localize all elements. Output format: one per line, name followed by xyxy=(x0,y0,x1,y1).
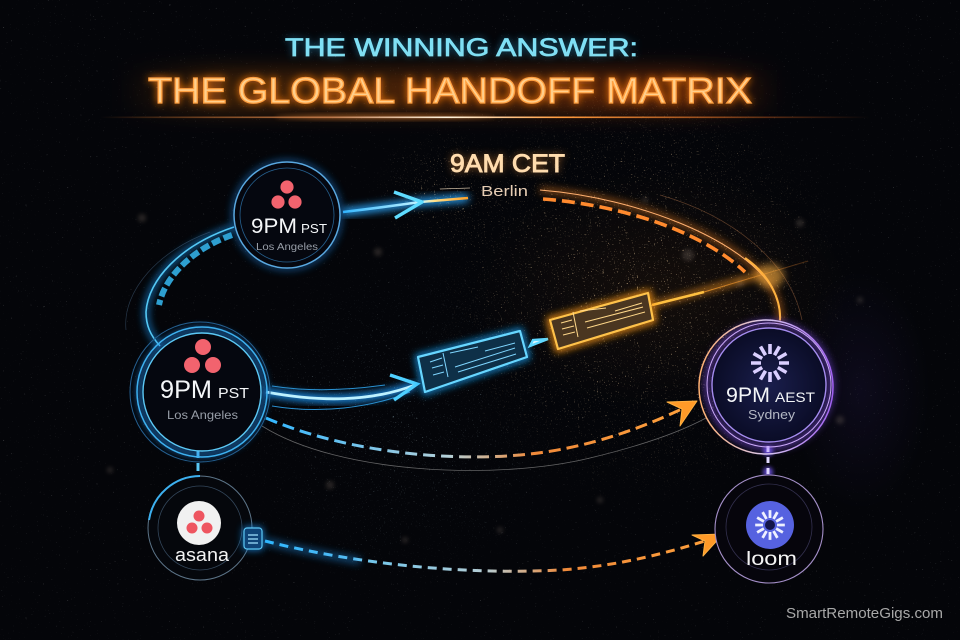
arrowhead: top connector xyxy=(394,192,422,218)
arrowhead: dashed connector xyxy=(667,401,697,426)
connector: asana to loom (dashed) xyxy=(265,534,723,571)
label: Los Angeles: Los Angeles xyxy=(167,408,238,422)
label: 9PM PST xyxy=(160,376,249,404)
icon: asana dots xyxy=(184,339,221,373)
ticket: blue xyxy=(418,331,527,392)
arrowhead: main connector xyxy=(390,375,417,400)
small arrow between tickets xyxy=(530,339,548,346)
node: Sydney xyxy=(699,320,833,454)
icon: loom logo xyxy=(746,501,794,549)
label: Sydney: Sydney xyxy=(748,408,796,422)
title block xyxy=(100,34,870,120)
connector: top Los Angeles to Berlin xyxy=(343,188,470,218)
label: 9PM PST: PST xyxy=(301,221,327,236)
icon: loom burst xyxy=(751,344,789,382)
label: loom: loom xyxy=(746,549,797,570)
label: 9PM PST xyxy=(251,215,327,238)
label: 9PM PST: 9PM xyxy=(251,215,297,238)
label: asana: asana xyxy=(175,545,230,565)
node: main Los Angeles xyxy=(130,322,270,462)
watermark: SmartRemoteGigs.com xyxy=(786,606,943,622)
title line 2: THE GLOBAL HANDOFF MATRIX xyxy=(148,70,752,111)
node: top Los Angeles xyxy=(234,162,340,268)
label: 9PM AEST: 9PM xyxy=(726,384,770,407)
node: asana xyxy=(148,476,252,580)
node: loom xyxy=(715,475,823,583)
icon: asana logo xyxy=(177,501,221,545)
label: 9AM CET: 9AM CET xyxy=(450,150,565,178)
label: 9PM PST: PST xyxy=(218,385,249,402)
title divider xyxy=(100,114,870,120)
label: 9PM AEST: AEST xyxy=(775,389,815,405)
icon: asana dots xyxy=(271,180,302,209)
title line 1: THE WINNING ANSWER: xyxy=(285,34,638,62)
connector: Berlin to Sydney xyxy=(540,190,802,322)
title line 1: THE WINNING ANSWER: xyxy=(285,34,638,62)
label: Los Angeles: Los Angeles xyxy=(256,241,318,253)
label: Berlin: Berlin xyxy=(481,183,528,200)
arrowhead: asana to loom xyxy=(692,534,723,556)
label: 9AM CET: 9AM CET xyxy=(450,150,565,178)
vertical link: Sydney to loom xyxy=(763,446,773,477)
label: 9PM AEST xyxy=(726,384,815,407)
beam: ticket to Sydney xyxy=(652,261,808,305)
label: 9PM PST: 9PM xyxy=(160,376,212,404)
icon: small document xyxy=(243,527,263,550)
glow: handoff point xyxy=(756,264,784,288)
connector: top Los Angeles to main Los Angeles xyxy=(126,227,234,346)
ticket: orange xyxy=(550,293,653,349)
connector: main Los Angeles arrow to ticket xyxy=(266,375,417,410)
title line 2: THE GLOBAL HANDOFF MATRIX xyxy=(148,70,752,111)
vertical link: Los Angeles to asana xyxy=(196,450,200,478)
connector: main Los Angeles to Sydney (dashed) xyxy=(262,401,706,470)
